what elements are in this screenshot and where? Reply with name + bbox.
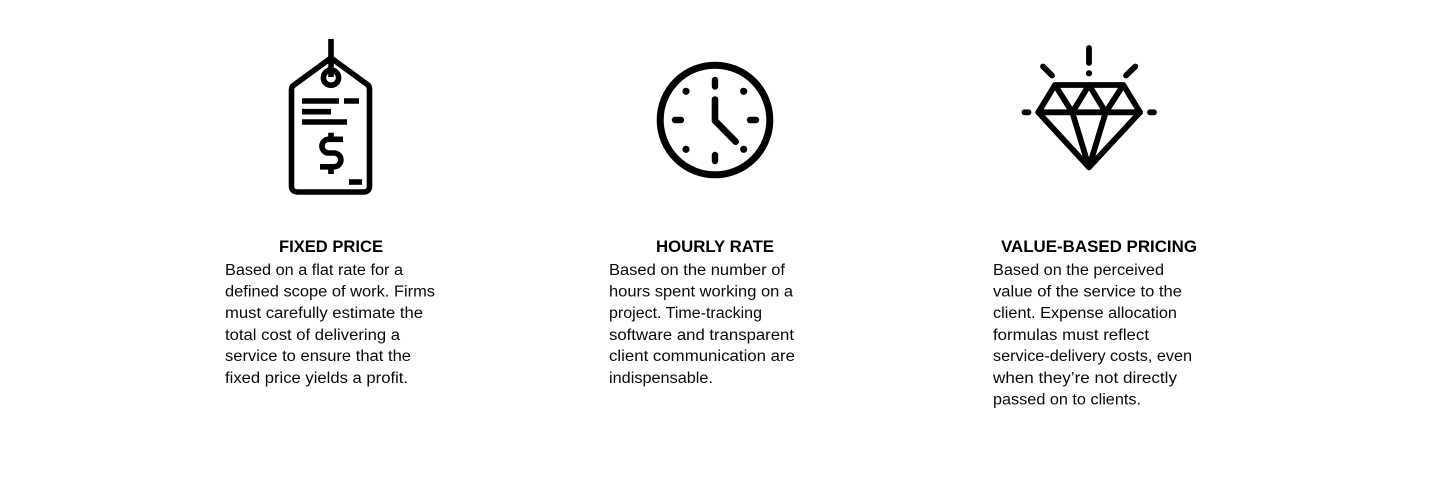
text block: value-based pricing description: passed on to clients. — [993, 392, 1141, 408]
text block: value-based pricing description: Based on the perceived — [993, 262, 1164, 279]
text block: value-based pricing description: formulas must reflect — [993, 327, 1150, 344]
text block: fixed price description: fixed price yields a profit. — [225, 370, 408, 387]
text block: value-based pricing description: value of the service to the — [993, 284, 1182, 300]
text block: fixed price description: defined scope of work. Firms — [225, 284, 435, 300]
panel: value-based pricing — [992, 48, 1197, 408]
text block: fixed price description: Based on a flat rate for a — [225, 262, 403, 279]
text block: hourly rate description — [609, 262, 795, 387]
text block: hourly rate description: hours spent working on a — [609, 284, 793, 300]
text block: fixed price description: must carefully estimate the — [225, 305, 423, 322]
text block: value-based pricing description: client. Expense allocation — [993, 305, 1177, 322]
heading: value-based pricing: VALUE-BASED PRICING — [1001, 237, 1197, 256]
heading: fixed price: FIXED PRICE — [279, 237, 383, 256]
icon: price tag — [292, 39, 370, 192]
panel: hourly rate — [609, 65, 795, 387]
text block: hourly rate description: client communication are — [609, 348, 795, 365]
text block: hourly rate description: project. Time-tracking — [609, 305, 762, 322]
text block: hourly rate description: Based on the number of — [609, 262, 786, 279]
text block: value-based pricing description: service-delivery costs, even — [993, 348, 1192, 365]
panel: fixed price — [225, 39, 435, 387]
icon: clock — [660, 65, 770, 175]
icon: diamond with rays — [1024, 48, 1154, 167]
heading: hourly rate: HOURLY RATE — [656, 237, 774, 256]
text block: hourly rate description: software and transparent — [609, 327, 795, 344]
text block: fixed price description: total cost of delivering a — [225, 327, 400, 344]
text block: fixed price description — [225, 262, 435, 387]
text block: hourly rate description: indispensable. — [609, 370, 713, 387]
text block: fixed price description: service to ensure that the — [225, 348, 411, 365]
text block: value-based pricing description — [992, 262, 1192, 408]
text block: value-based pricing description: when they’re not directly — [992, 370, 1177, 387]
